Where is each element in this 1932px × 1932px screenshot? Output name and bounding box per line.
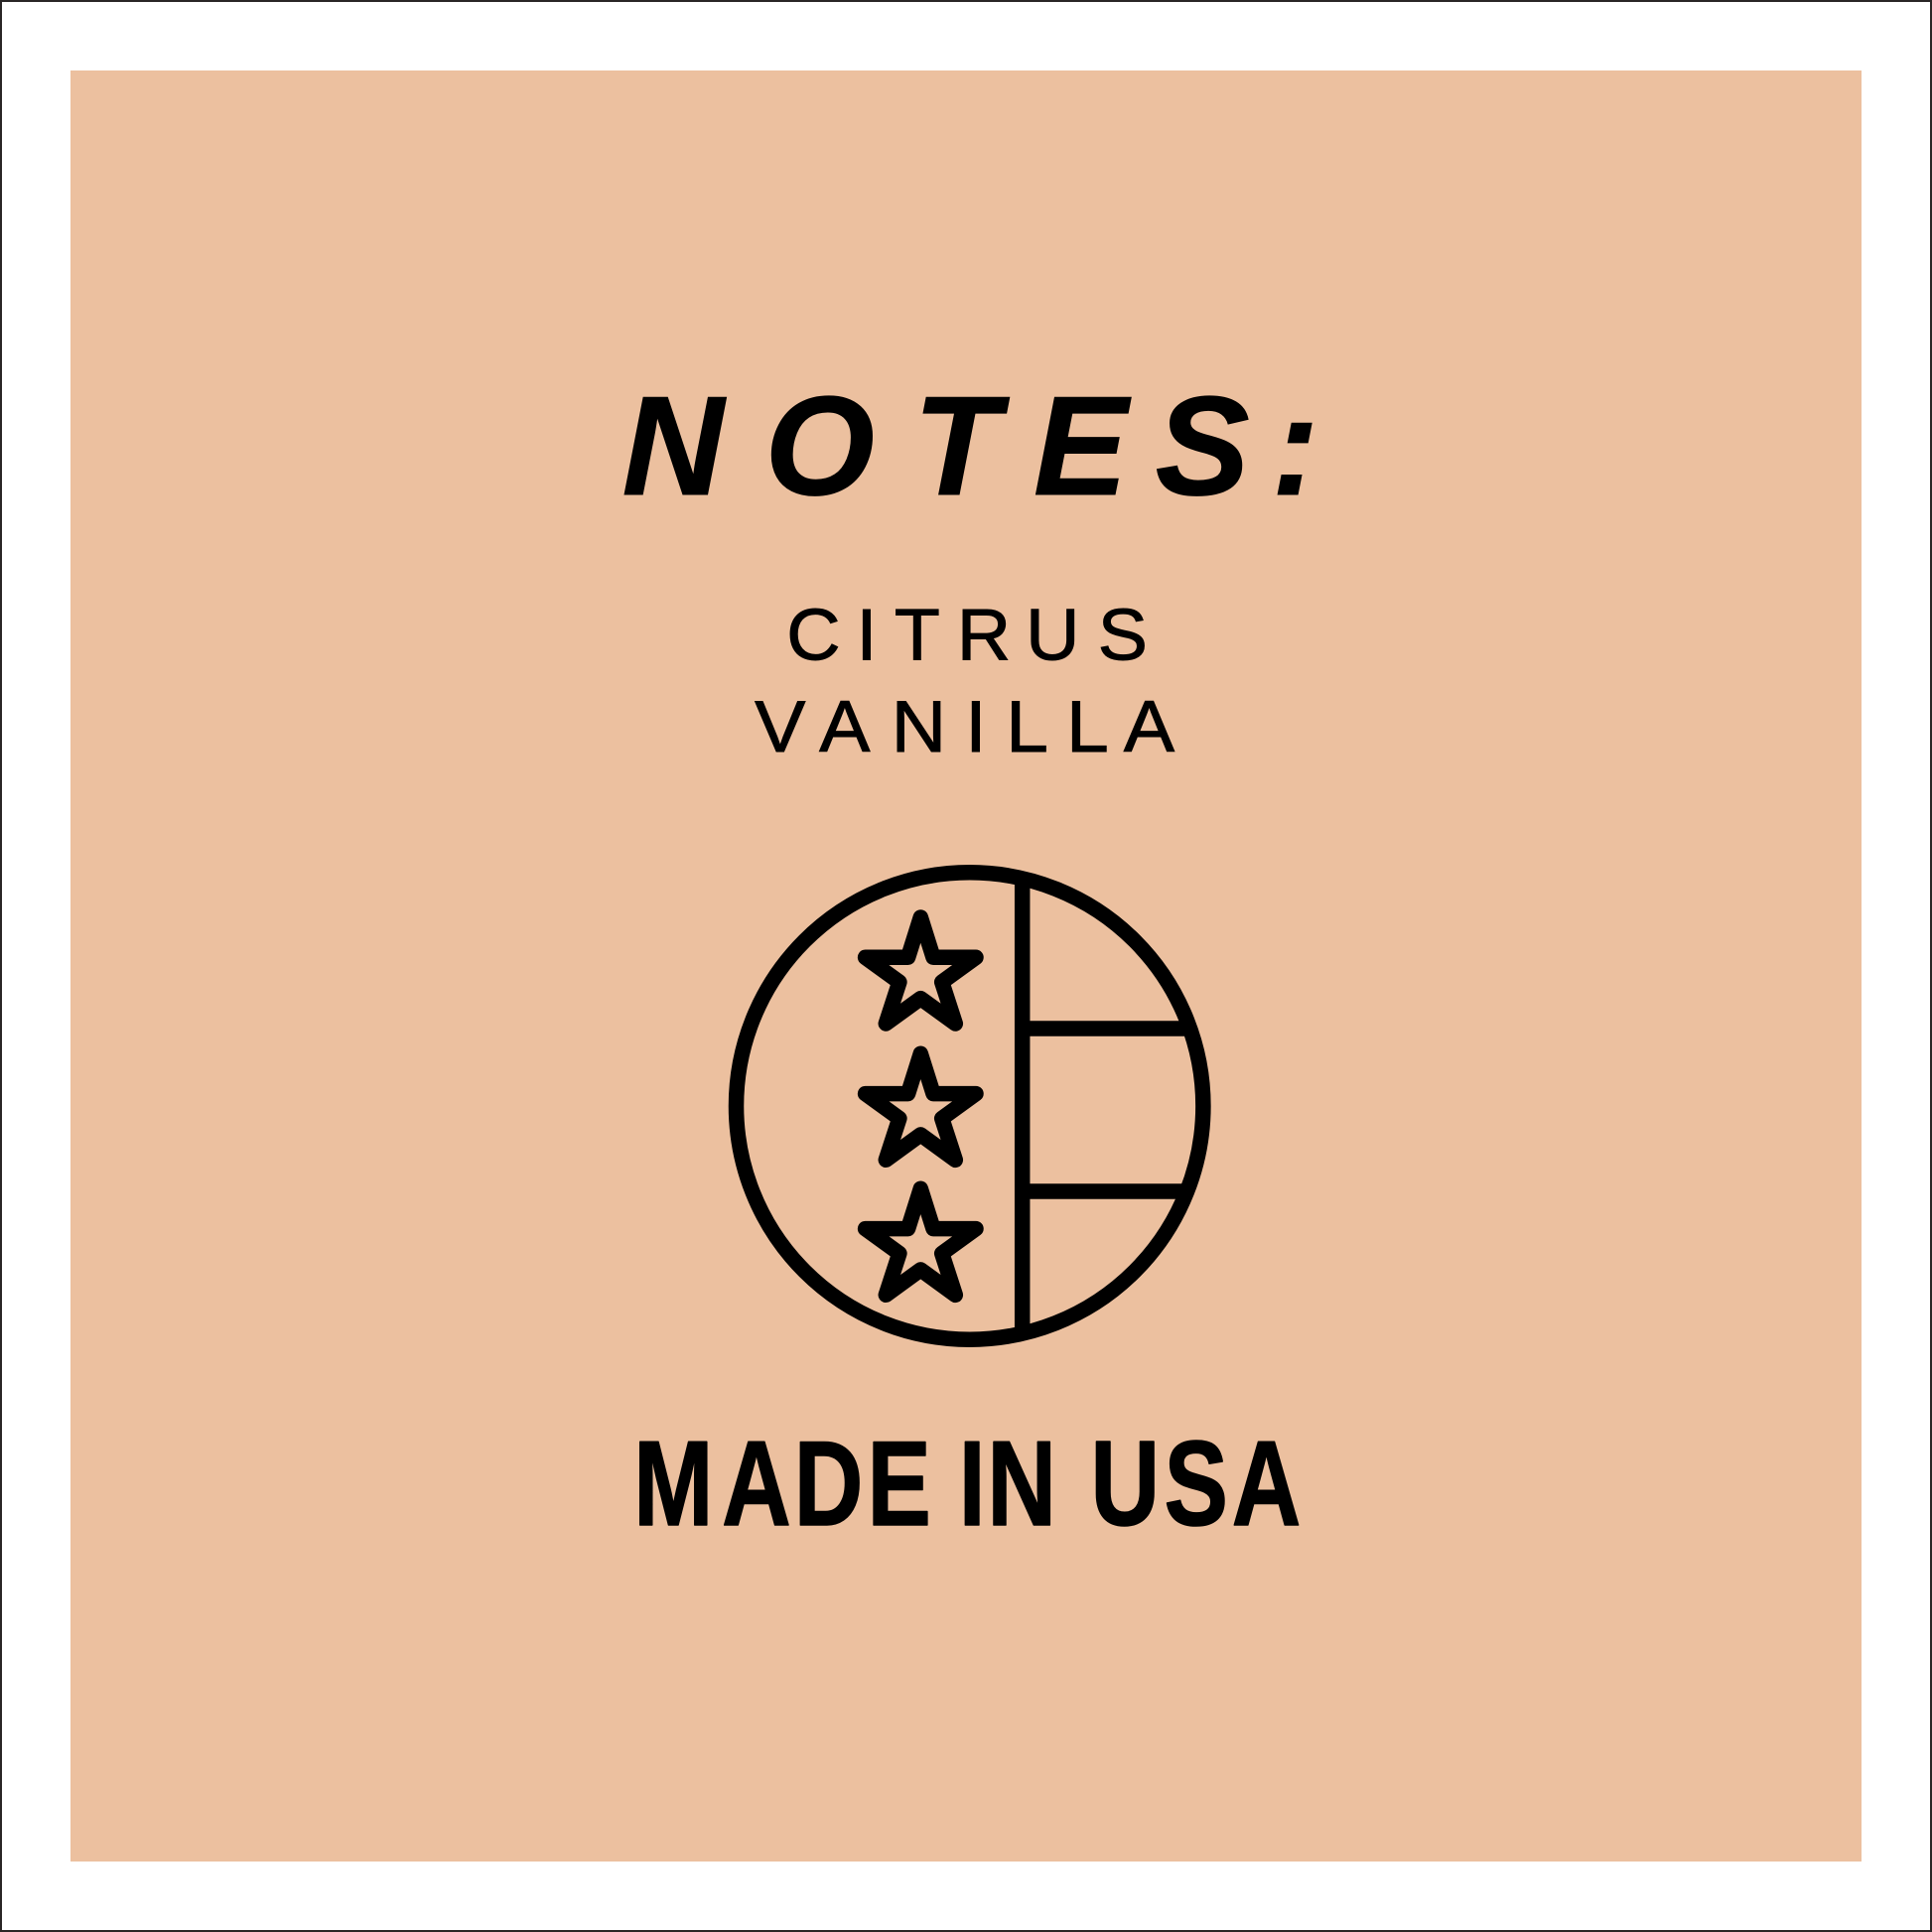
icon: globe with three stars and stripes: [737, 873, 1203, 1339]
text: made in usa: MADE IN USA: [633, 1416, 1301, 1552]
icon: bottom star: [866, 1188, 976, 1295]
icon: middle star: [866, 1053, 976, 1160]
icon: upper stripe: [1023, 1021, 1187, 1036]
icon: circle outline: [737, 873, 1203, 1339]
icon: top star: [866, 917, 976, 1024]
text: vanilla: VANILLA: [755, 686, 1174, 767]
icon: lower stripe: [1023, 1183, 1187, 1199]
text: citrus: CITRUS: [786, 594, 1148, 675]
icon: vertical divider: [1015, 876, 1030, 1336]
title: notes: NOTES:: [622, 367, 1318, 525]
